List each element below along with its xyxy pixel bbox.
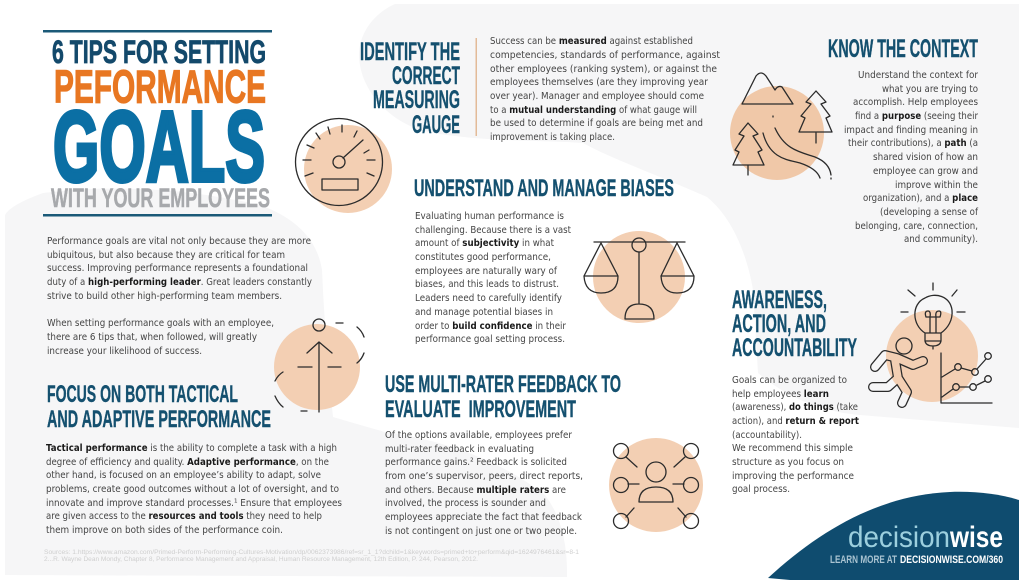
text: awareness action accountability: goal process. <box>732 484 790 495</box>
icon: multi-rater network <box>609 438 703 532</box>
text: biases: biases, and this leads to distrust. <box>415 279 559 290</box>
text: awareness action accountability: Goals can be organized to <box>732 375 847 386</box>
heading: awareness action accountability: AWARENESS, <box>732 286 827 314</box>
intro text <box>47 236 312 357</box>
title block <box>43 30 272 216</box>
text: measuring gauge: be used to determine if goals are being met and <box>490 118 703 129</box>
icon: scales <box>584 231 694 323</box>
text: awareness action accountability: (awareness), do things (take <box>732 402 858 413</box>
heading: awareness action accountability <box>732 286 857 362</box>
sources <box>44 549 579 563</box>
text: biases: order to build confidence in their <box>415 321 567 332</box>
text: tactical and adaptive: innovate and improve standard processes.¹ Ensure that employees <box>46 498 342 509</box>
icon: upward arrow <box>274 319 364 412</box>
intro text: strive to build other high-performing team members. <box>47 291 282 302</box>
text: measuring gauge: over year). Manager and employee should come <box>490 91 704 102</box>
text: know the context: find a purpose (seeing their <box>855 111 979 122</box>
footer: decisionwise brand: wise <box>949 521 1003 554</box>
text: know the context: accomplish. Help employees <box>853 97 978 108</box>
text: biases: employees are naturally wary of <box>415 266 557 277</box>
heading: measuring gauge <box>360 38 460 139</box>
footer: decisionwise brand: decision <box>848 521 950 554</box>
text: awareness action accountability: structure as you focus on <box>732 457 844 468</box>
text: multi-rater: involved, the process is sounder and <box>385 498 546 509</box>
text: tactical and adaptive: them improve on both sides of the performance coin. <box>46 525 283 536</box>
text: multi-rater: is not contingent on just one or two people. <box>385 526 577 537</box>
text: tactical and adaptive: problems, create good outcomes without a lot of oversight, and to <box>46 484 339 495</box>
text: tactical and adaptive <box>46 443 342 536</box>
intro text: ubiquitous, but also because they are critical for team <box>47 250 285 261</box>
text: measuring gauge: Success can be measured against established <box>490 36 693 47</box>
text: multi-rater: multi-rater feedback in evaluating <box>385 444 534 455</box>
title block: PEFORMANCE <box>54 60 266 112</box>
heading: measuring gauge: GAUGE <box>412 111 460 139</box>
text: biases: Leaders need to carefully identify <box>415 293 562 304</box>
text: know the context: improve within the <box>895 180 978 191</box>
text: tactical and adaptive: other hand, is focused on an employee’s ability to adapt, solve <box>46 470 321 481</box>
text: biases: amount of subjectivity in what <box>415 238 554 249</box>
text: know the context: Understand the context for <box>858 70 979 81</box>
text: multi-rater: employees appreciate the fact that feedback <box>385 512 582 523</box>
heading: multi-rater <box>385 371 621 423</box>
intro text: there are 6 tips that, when followed, will greatly <box>47 332 257 343</box>
heading: tactical and adaptive: AND ADAPTIVE PERFORMANCE <box>47 406 271 433</box>
heading: multi-rater: EVALUATE IMPROVEMENT <box>385 396 576 423</box>
title block: WITH YOUR EMPLOYEES <box>51 183 270 213</box>
text: know the context: and community). <box>904 234 978 245</box>
divider <box>476 38 477 136</box>
text: know the context: belonging, care, connection, <box>855 221 978 232</box>
text: awareness action accountability: improving the performance <box>732 471 854 482</box>
text: biases: Evaluating human performance is <box>415 211 564 222</box>
footer: decisionwise brand <box>768 492 1019 580</box>
text: multi-rater: and others. Because multiple raters are <box>385 485 566 496</box>
heading: measuring gauge: MEASURING <box>373 86 460 114</box>
footer: decisionwise brand: LEARN MORE AT <box>830 554 897 566</box>
text: awareness action accountability: (accountability). <box>732 430 802 441</box>
text: know the context: organization), and a place <box>863 193 978 204</box>
intro text: increase your likelihood of success. <box>47 346 202 357</box>
text: tactical and adaptive: Tactical performance is the ability to complete a task with a high <box>46 443 337 454</box>
text: biases: challenging. Because there is a vast <box>415 225 571 236</box>
heading: tactical and adaptive: FOCUS ON BOTH TACTICAL <box>47 381 238 408</box>
text: biases: and manage potential biases in <box>415 307 553 318</box>
text: know the context: their contributions), a path (a <box>848 138 978 149</box>
intro text: Performance goals are vital not only because they are more <box>47 236 311 247</box>
icon: landscape <box>730 73 832 180</box>
text: tactical and adaptive: are given access to the resources and tools they need to help <box>46 511 322 522</box>
text: measuring gauge: employees themselves (are they improving year <box>490 77 709 88</box>
text: awareness action accountability: We recommend this simple <box>732 443 853 454</box>
text: awareness action accountability: action), and return & report <box>732 416 859 427</box>
heading: multi-rater: USE MULTI-RATER FEEDBACK TO <box>385 371 621 398</box>
heading: awareness action accountability: ACCOUNTABILITY <box>732 334 857 362</box>
heading: awareness action accountability: ACTION, AND <box>732 310 826 338</box>
sources: 2...R. Wayne Dean Mondy, Chapter 8, Performance Management and Appraisal, Human Resource Management, 12th Edition, P. 244, Pearson, 2012. <box>44 556 478 563</box>
text: measuring gauge: to a mutual understanding of what gauge will <box>490 105 697 116</box>
intro text: success. Improving performance represents a foundational <box>47 263 308 274</box>
text: multi-rater <box>385 430 583 537</box>
icon: bulb, runner and chart <box>873 283 992 403</box>
intro text: duty of a high-performing leader. Great leaders constantly <box>47 277 312 288</box>
heading: measuring gauge: CORRECT <box>392 62 460 90</box>
text: multi-rater: performance gains.² Feedback is solicited <box>385 457 567 468</box>
heading: tactical and adaptive <box>47 381 271 433</box>
text: tactical and adaptive: degree of efficiency and quality. Adaptive performance, on the <box>46 457 329 468</box>
intro text: When setting performance goals with an employee, <box>47 318 274 329</box>
heading: measuring gauge: IDENTIFY THE <box>360 38 460 66</box>
text: know the context: shared vision of how an <box>873 152 978 163</box>
text: measuring gauge: competencies, standards of performance, against <box>490 50 720 61</box>
text: awareness action accountability <box>732 375 859 495</box>
text: know the context: what you are trying to <box>882 84 978 95</box>
text: biases: performance goal setting process. <box>415 334 565 345</box>
text: know the context <box>844 70 979 245</box>
text: know the context: impact and finding meaning in <box>844 125 978 136</box>
heading: biases: UNDERSTAND AND MANAGE BIASES <box>414 175 674 202</box>
text: know the context: employee can grow and <box>873 166 978 177</box>
text: measuring gauge <box>490 36 720 143</box>
text: know the context: (developing a sense of <box>880 207 978 218</box>
title block: GOALS <box>53 91 265 203</box>
text: biases: constitutes good performance, <box>415 252 551 263</box>
text: multi-rater: from one’s supervisor, peers, direct reports, <box>385 471 583 482</box>
text: biases <box>415 211 571 345</box>
sources: Sources: 1.https://www.amazon.com/Primed-Perform-Performing-Cultures-Motivation/dp/0062373986/ref=sr_1_1?dchild=1&keywords=primed+to+perform&qid=1624976461&sr=8-1 <box>44 549 579 556</box>
title block: 6 TIPS FOR SETTING <box>52 34 266 70</box>
text: measuring gauge: other employees (ranking system), or against the <box>490 64 717 75</box>
text: awareness action accountability: help employees learn <box>732 389 829 400</box>
icon: gauge <box>296 118 392 213</box>
text: multi-rater: Of the options available, employees prefer <box>385 430 573 441</box>
text: measuring gauge: improvement is taking place. <box>490 132 615 143</box>
